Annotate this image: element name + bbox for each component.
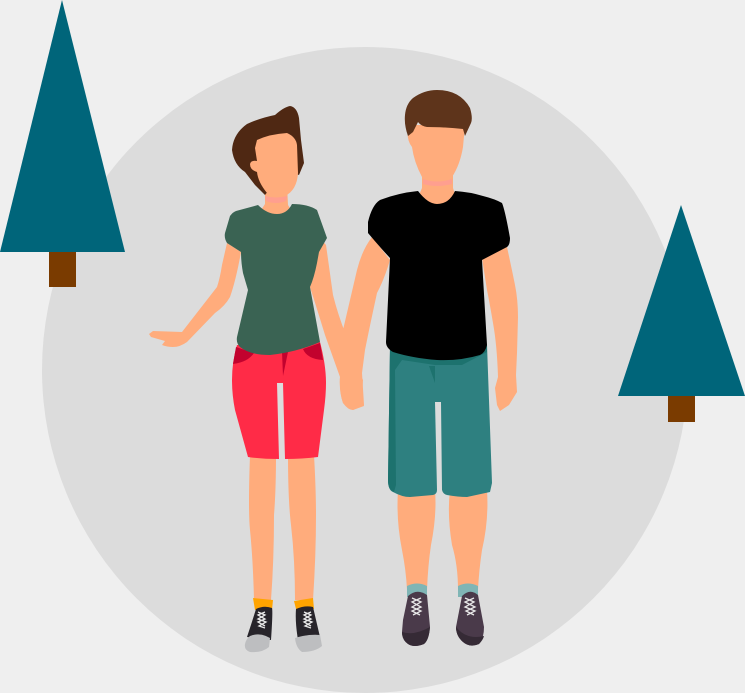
- man right arm: [482, 247, 518, 411]
- man left shoe: [402, 584, 430, 646]
- woman neck shadow: [265, 196, 287, 203]
- left tree: [0, 0, 125, 287]
- man face: [408, 125, 465, 184]
- right tree canopy: [618, 205, 745, 396]
- right tree trunk: [668, 394, 695, 422]
- woman left shoe: [245, 598, 273, 652]
- woman face: [250, 133, 298, 197]
- woman shorts: [232, 342, 326, 459]
- woman neck: [256, 185, 296, 218]
- man left arm: [340, 237, 390, 410]
- woman hair: [232, 106, 304, 195]
- man shirt: [368, 191, 510, 360]
- man right shoe laces: [465, 598, 475, 615]
- woman right shoe: [294, 598, 322, 652]
- woman figure: [149, 106, 364, 652]
- woman shirt: [225, 204, 327, 355]
- woman left shoe laces: [258, 612, 266, 628]
- man hair: [405, 90, 472, 136]
- left tree canopy: [0, 0, 125, 252]
- man legs: [398, 490, 487, 590]
- woman right shoe laces: [304, 612, 312, 628]
- man right shoe: [456, 584, 484, 646]
- woman legs: [249, 455, 316, 600]
- woman shorts pockets: [233, 343, 323, 376]
- man left shoe laces: [412, 598, 421, 615]
- man shorts: [388, 345, 492, 497]
- left tree trunk: [49, 250, 76, 287]
- woman left arm: [149, 243, 241, 347]
- man figure: [340, 90, 518, 646]
- man shorts shading: [388, 345, 487, 492]
- man neck shadow: [423, 179, 452, 186]
- woman right arm: [310, 240, 364, 410]
- man neck: [413, 170, 460, 210]
- right tree: [618, 205, 745, 422]
